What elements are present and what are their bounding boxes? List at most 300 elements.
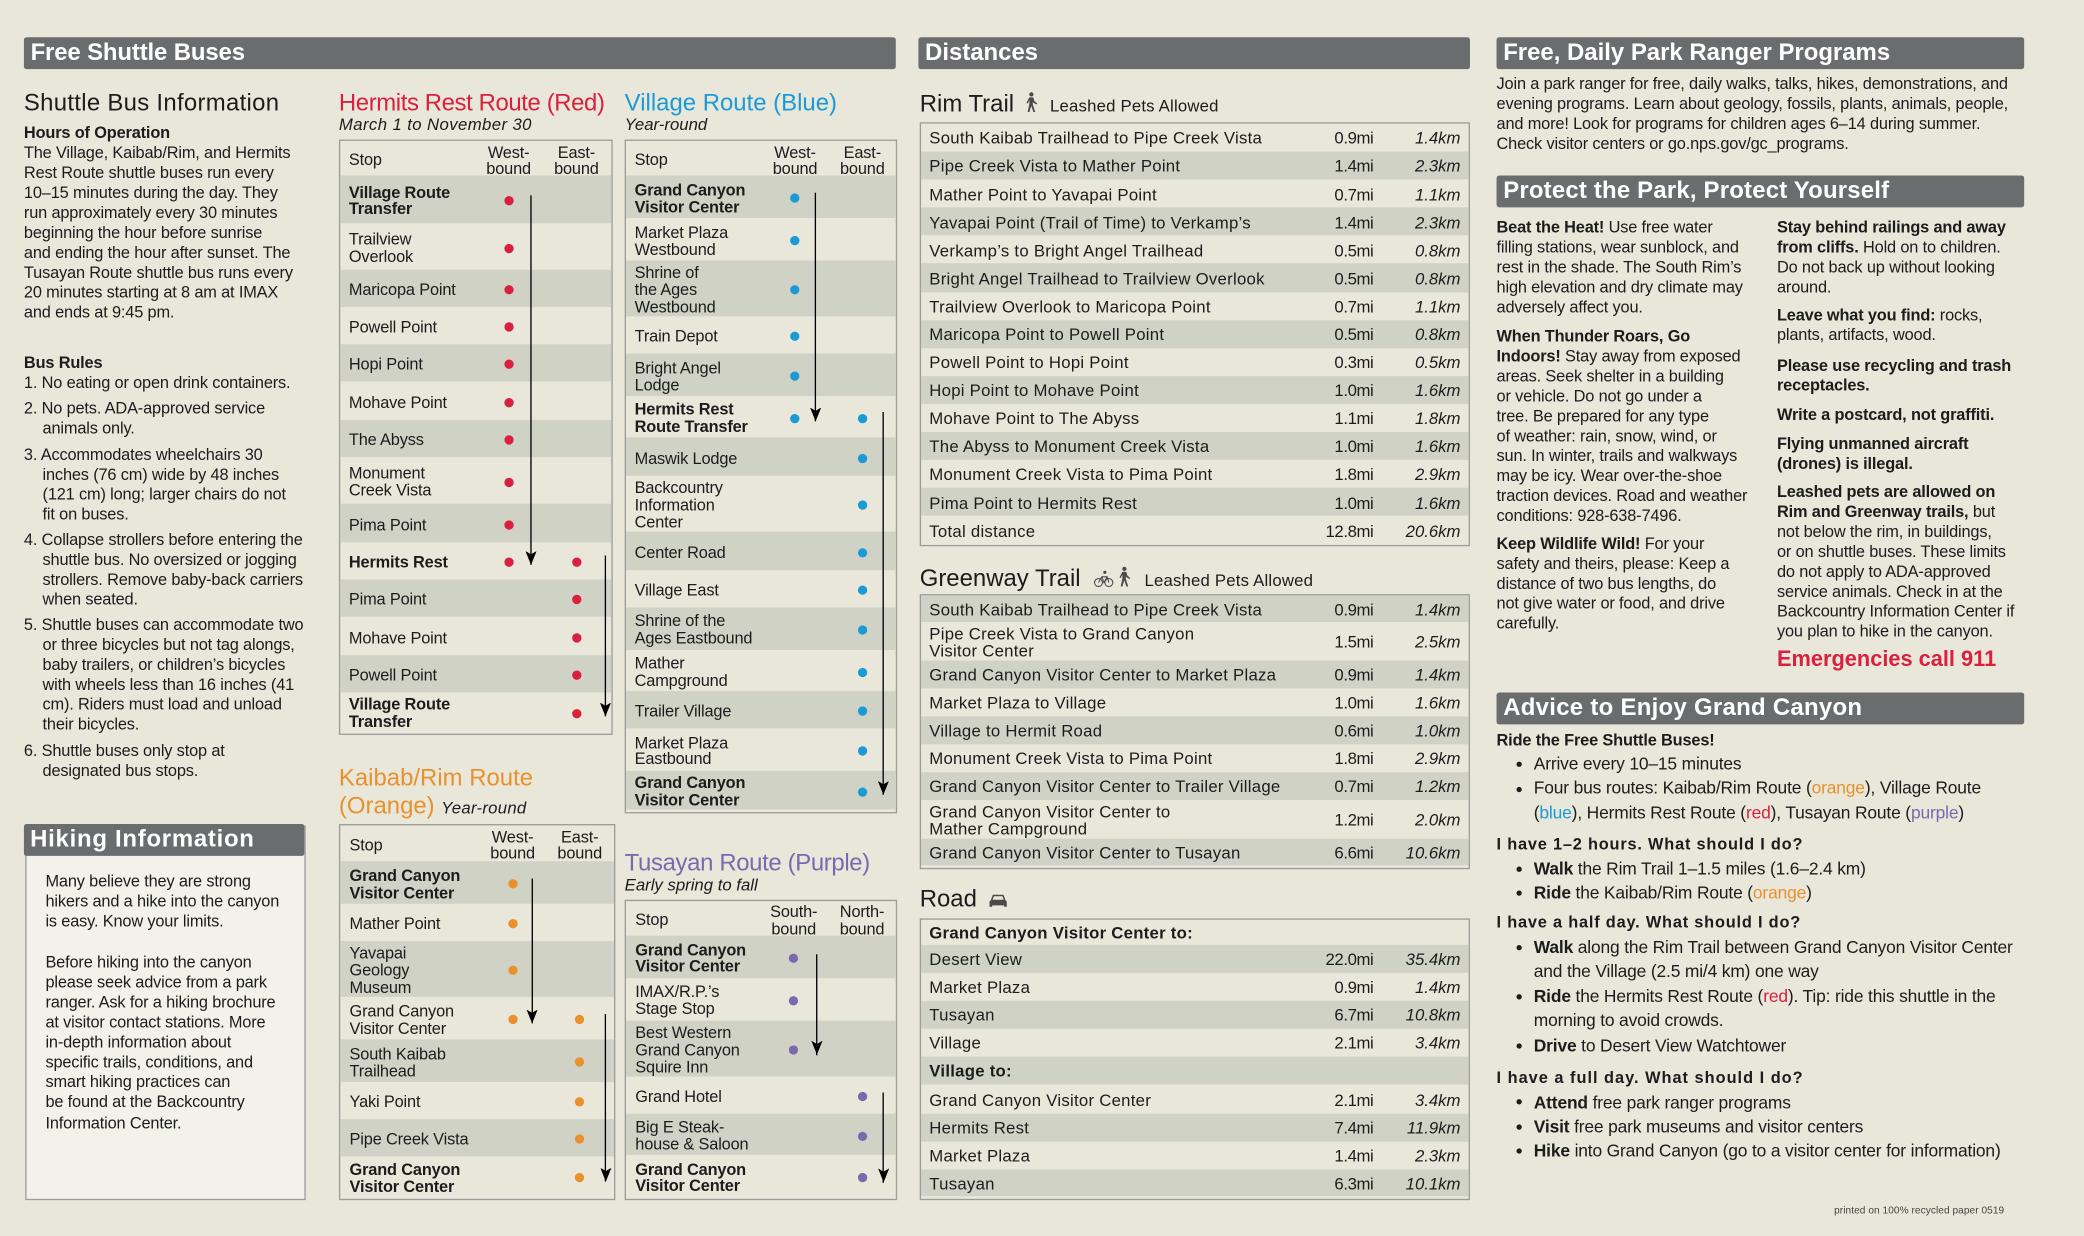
stop: Grand Canyon (635, 181, 745, 199)
row (929, 129, 1460, 148)
row: 1.4km (1415, 979, 1460, 997)
section header: Free Shuttle Buses (24, 37, 896, 69)
bullet list: Arrive every 10–15 minutes (1534, 754, 1741, 774)
row: 1.6km (1415, 438, 1460, 456)
arrow: southbound (816, 954, 818, 1055)
row: 1.2km (1415, 778, 1460, 797)
stop (350, 1093, 584, 1111)
stop: Grand Canyon (350, 1160, 460, 1179)
section header: Free, Daily Park Ranger Programs (1497, 37, 2024, 69)
bullet list: and the Village (2.5 mi/4 km) one way (1534, 961, 1819, 981)
text block: Stay behind railings: Do not back up without looking (1777, 257, 1995, 276)
text block: ranger programs (1497, 74, 2008, 154)
table header: South- (770, 902, 817, 921)
row: 2.1mi (1334, 1091, 1373, 1110)
arrow: eastbound (605, 1014, 607, 1182)
bullet list: Four bus routes: Kaibab/Rim Route (orange), Village Route (1534, 778, 1981, 798)
table header (635, 143, 885, 178)
arrow: westbound (815, 193, 816, 421)
row: 0.9mi (1334, 666, 1373, 685)
stop: Stage Stop (635, 1000, 715, 1018)
row (920, 660, 1469, 688)
row: 1.4km (1415, 600, 1460, 619)
row (920, 432, 1469, 460)
text block: Hours of Operation: and ending the hour after sunset. The (24, 244, 290, 262)
row (920, 152, 1469, 180)
stop (340, 270, 611, 307)
stop (349, 628, 582, 647)
row: Tusayan (929, 1007, 995, 1025)
text block: When Thunder Roars: or vehicle. Do not go under a (1497, 387, 1702, 406)
stop: Visitor Center (635, 1177, 740, 1195)
table header: bound (773, 160, 817, 178)
row: 0.3mi (1334, 354, 1373, 372)
row: Powell Point to Hopi Point (929, 354, 1129, 372)
stop: Best Western (635, 1023, 731, 1042)
bullet list (1534, 1091, 2001, 1164)
text block: Hours of Operation: and ends at 9:45 pm. (24, 304, 174, 322)
row: 0.7mi (1334, 298, 1373, 316)
stop: Transfer (349, 712, 412, 731)
stop (635, 983, 798, 1018)
text block: postcard: Write a postcard, not graffiti. (1777, 405, 1994, 423)
stop (349, 230, 514, 266)
row (920, 772, 1469, 800)
stop: Backcountry (635, 479, 723, 498)
table header: North- (840, 902, 884, 921)
row (920, 348, 1469, 376)
stop: Mather Point (350, 915, 440, 933)
table: Hermits Rest Route stops (338, 140, 613, 735)
row (929, 185, 1460, 204)
text block: Ride the Free Shuttle Buses (1497, 728, 2024, 825)
text block: ranger programs: evening programs. Learn about geology, fossils, plants, animals, people, (1497, 94, 2008, 113)
text block: Hours of Operation: Rest Route shuttle buses run every (24, 164, 274, 182)
stop (635, 479, 868, 532)
rule 3: inches (76 cm) wide by 48 inches (43, 465, 279, 483)
stop: Route Transfer (635, 418, 748, 436)
text block: recycling: receptacles. (1777, 376, 1870, 394)
stop: Bright Angel (635, 359, 721, 377)
stop (350, 1160, 584, 1196)
text block: drones: Flying unmanned aircraft (1777, 434, 1968, 453)
heading: Greenway Trail: Greenway Trail Leashed Pets Allowed (920, 565, 1313, 591)
stop: Monument (349, 464, 425, 483)
table header: bound (840, 919, 884, 938)
stop: South Kaibab (350, 1045, 446, 1063)
stop (340, 579, 611, 617)
row: 2.9km (1415, 466, 1460, 484)
table header: West- (492, 827, 533, 846)
text block: Hours of Operation: The Village, Kaibab/Rim, and Hermits (24, 144, 290, 162)
stop: Village East (635, 581, 719, 599)
text block: hiking advice: Before hiking into the canyon (45, 953, 252, 972)
table: Tusayan Route stops (625, 899, 897, 1200)
stop: Ages Eastbound (635, 629, 752, 648)
bullet list (1534, 857, 1866, 906)
row: Pima Point to Hermits Rest (929, 494, 1137, 512)
table: Road distances (919, 918, 1470, 1200)
row: 2.3km (1415, 213, 1460, 232)
stop: Geology (350, 961, 409, 980)
stop (634, 581, 868, 599)
row: Grand Canyon Visitor Center (929, 1091, 1151, 1110)
text block: Leave what you find (1777, 306, 1982, 346)
text block: When Thunder Roars: sun. In winter, trails and walkways (1497, 447, 1737, 466)
stop: Train Depot (635, 327, 718, 346)
row: Grand Canyon Visitor Center to (929, 803, 1170, 821)
rule 5: their bicycles. (43, 715, 139, 733)
stop: Creek Vista (349, 481, 431, 500)
rule 2: animals only. (43, 418, 135, 437)
row: 0.9mi (1334, 129, 1373, 148)
text block: hiking advice: at visitor contact stations. More (45, 1013, 265, 1032)
text block: When Thunder Roars (1497, 327, 1747, 527)
table header: West- (488, 143, 529, 161)
stop: Market Plaza (635, 223, 728, 242)
stop (349, 393, 514, 411)
row (920, 716, 1469, 744)
stop: Pima Point (349, 590, 426, 609)
arrow: eastbound (883, 412, 884, 795)
stop: Big E Steak- (635, 1118, 724, 1137)
stop: Powell Point (349, 666, 437, 684)
row: Bright Angel Trailhead to Trailview Overlook (929, 270, 1265, 288)
row: 6.6mi (1334, 843, 1373, 862)
row: The Abyss to Monument Creek Vista (929, 438, 1209, 456)
stop: Grand Canyon (635, 1041, 740, 1059)
row: 1.6km (1415, 694, 1460, 713)
heading: Kaibab/Rim Route (Orange) (339, 764, 533, 818)
text block: Keep Wildlife Wild: Keep Wildlife Wild! For your (1497, 534, 1704, 552)
text block: Hours of Operation: Tusayan Route shuttle bus runs every (24, 264, 293, 282)
stop (625, 176, 896, 218)
row (920, 800, 1469, 838)
row (920, 236, 1469, 264)
text block: Keep Wildlife Wild: carefully. (1497, 614, 1559, 632)
row: 6.7mi (1334, 1007, 1373, 1025)
stop: Visitor Center (350, 1177, 454, 1196)
row: Hopi Point to Mohave Point (929, 382, 1139, 400)
stop: Visitor Center (635, 791, 739, 810)
text block: drones: (drones) is illegal. (1777, 454, 1913, 473)
row: 1.5mi (1334, 633, 1373, 652)
table: Kaibab/Rim Route stops (339, 824, 615, 1200)
stop (340, 504, 611, 542)
row: 0.5mi (1334, 241, 1373, 260)
stop: Trailview (349, 230, 411, 249)
stop: Visitor Center (635, 958, 740, 976)
row: 1.6km (1415, 382, 1460, 400)
stop: The Abyss (349, 431, 424, 449)
row (920, 1142, 1469, 1170)
header: Hiking Information (24, 824, 304, 856)
bullet list: morning to avoid crowds. (1534, 1010, 1723, 1030)
text block: leashed pets: Leashed pets are allowed on (1777, 482, 1995, 501)
stop: Yavapai (350, 944, 406, 963)
row: Hermits Rest (929, 1120, 1029, 1138)
stop: Grand Canyon (635, 941, 746, 959)
stop (350, 1002, 584, 1038)
rule 3: fit on buses. (43, 505, 129, 523)
stop: Visitor Center (350, 1019, 446, 1038)
table header: bound (771, 919, 816, 938)
text block: hiking advice: in-depth information about (45, 1033, 231, 1052)
row: from Village: Village to: (929, 1063, 1012, 1081)
row (920, 945, 1469, 973)
table header: bound (557, 844, 602, 863)
stop (626, 1113, 896, 1155)
text block: Beat the Heat: Beat the Heat! Use free water (1497, 218, 1713, 237)
row: Grand Canyon Visitor Center to Market Plaza (929, 666, 1276, 685)
table header (349, 143, 599, 178)
stop (635, 1087, 868, 1106)
row: 2.3km (1415, 157, 1460, 176)
table header (350, 827, 602, 863)
stop: Hermits Rest (635, 401, 734, 419)
text block: When Thunder Roars: may be icy. Wear over-the-shoe (1497, 467, 1722, 486)
row (920, 292, 1469, 320)
text block: Beat the Heat: rest in the shade. The South Rim’s (1497, 258, 1741, 277)
text block: full day (1497, 1066, 2024, 1166)
stop: Museum (350, 978, 411, 997)
row: 7.4mi (1334, 1120, 1373, 1138)
rule 5: 5. Shuttle buses can accommodate two (24, 615, 303, 633)
row: 10.8km (1406, 1007, 1460, 1025)
table header: bound (486, 160, 531, 178)
row: Monument Creek Vista to Pima Point (929, 466, 1212, 484)
text block: hiking advice: please seek advice from a park (45, 973, 267, 992)
stop (625, 438, 896, 476)
rule 5: or three bicycles but not tag alongs, (43, 635, 295, 653)
stop (350, 915, 518, 933)
row: Mather Campground (929, 820, 1087, 838)
text block: Beat the Heat: adversely affect you. (1497, 298, 1643, 317)
text block: hiking advice: is easy. Know your limits. (45, 912, 224, 930)
text block: When Thunder Roars: traction devices. Road and weather (1497, 487, 1747, 506)
row: 1.0mi (1334, 694, 1373, 713)
stop: Pima Point (349, 515, 426, 534)
section header: Free, Daily Park Ranger Programs: Free, Daily Park Ranger Programs (1503, 39, 1890, 65)
stop (349, 318, 514, 337)
panel: Hiking Information (25, 825, 305, 1200)
bullet list: Walk along the Rim Trail between Grand Canyon Visitor Center (1534, 937, 2013, 957)
row: 1.1km (1415, 185, 1460, 204)
stop: Hermits Rest (349, 553, 448, 571)
section header: Distances: Distances (925, 39, 1038, 65)
table: Village Route stops (624, 140, 897, 813)
row: South Kaibab Trailhead to Pipe Creek Vista (929, 129, 1262, 148)
text block: ranger programs: Check visitor centers or go.nps.gov/gc_programs. (1497, 134, 1849, 153)
table header: Stop (635, 150, 668, 169)
section header: Free Shuttle Buses: Free Shuttle Buses (31, 39, 245, 65)
stop (625, 532, 896, 570)
text block: hiking advice: specific trails, conditions, and (45, 1053, 253, 1072)
row: Desert View (929, 951, 1022, 970)
heading: Hermits Rest Route (Red) (339, 89, 605, 134)
row: 1.4mi (1334, 1148, 1373, 1166)
text block: Hours of Operation: Hours of Operation (24, 124, 170, 142)
stop (349, 553, 582, 571)
row: Monument Creek Vista to Pima Point (929, 750, 1212, 769)
stop: Squire Inn (635, 1058, 708, 1076)
row: Mohave Point to The Abyss (929, 410, 1139, 428)
stop (626, 936, 896, 978)
heading: Village Route (Blue) (624, 89, 837, 134)
text block: Stay behind railings: Stay behind railings and away (1777, 217, 2006, 236)
row: 2.9km (1415, 750, 1460, 769)
text block: Stay behind railings: around. (1777, 277, 1831, 296)
text block: Stay behind railings (1777, 217, 2006, 297)
stop: Grand Canyon (350, 1002, 454, 1021)
row (920, 320, 1469, 348)
row: Market Plaza to Village (929, 694, 1106, 713)
row: 0.8km (1415, 326, 1460, 344)
stop (626, 1020, 896, 1076)
stop: Visitor Center (350, 883, 454, 902)
section header: Protect the Park, Protect Yourself (1497, 175, 2024, 207)
rule 3 (24, 445, 286, 523)
row (920, 744, 1469, 772)
table header: East- (844, 143, 881, 161)
stop: Market Plaza (635, 733, 728, 752)
text block: leashed pets: you plan to hike in the canyon. (1777, 622, 1993, 641)
bullet list: Walk the Rim Trail 1–1.5 miles (1.6–2.4 km) (1534, 858, 1866, 878)
stop (635, 733, 868, 769)
text block: leashed pets: service animals. Check in at the (1777, 582, 2003, 601)
row: 0.5km (1415, 354, 1460, 372)
stop: Pipe Creek Vista (350, 1130, 468, 1149)
text block: Ride the Free Shuttle Buses: Ride the Free Shuttle Buses! (1497, 731, 1715, 750)
table header: bound (490, 844, 535, 863)
table: Rim Trail distances (919, 122, 1470, 546)
row: 0.7mi (1334, 185, 1373, 204)
stop: Campground (635, 671, 728, 690)
stop: Overlook (349, 247, 413, 266)
row: 1.8mi (1334, 466, 1373, 484)
text block: When Thunder Roars: When Thunder Roars, Go (1497, 327, 1690, 346)
text block: ranger programs: and more! Look for programs for children ages 6–14 during summer. (1497, 114, 1980, 133)
table: Greenway Trail distances (919, 594, 1470, 869)
text block: 1–2 hours (1497, 832, 2024, 906)
row: 1.0mi (1334, 382, 1373, 400)
row: total (920, 516, 1469, 544)
stop: Center (635, 513, 683, 532)
row: 35.4km (1406, 951, 1460, 970)
text block: leashed pets: Backcountry Information Center if (1777, 602, 2014, 621)
rule 2 (24, 398, 265, 437)
text block: hiking advice: smart hiking practices can (45, 1073, 230, 1092)
row: total: Total distance (929, 522, 1035, 540)
row (920, 973, 1469, 1001)
section header: Protect the Park, Protect Yourself: Protect the Park, Protect Yourself (1503, 177, 1889, 203)
table header: Stop (349, 150, 382, 169)
text block: Beat the Heat: high elevation and dry climate may (1497, 278, 1743, 297)
stop: Mather (635, 654, 685, 673)
row (920, 208, 1469, 236)
header: Hiking Information: Hiking Information (30, 826, 255, 852)
heading: Tusayan Route (Purple): Tusayan Route (Purple) (625, 849, 870, 875)
heading: Shuttle Bus Information: Shuttle Bus Information (24, 89, 279, 116)
text block: hiking advice (45, 872, 279, 1132)
row: 1.0km (1415, 722, 1460, 741)
stop: Lodge (635, 376, 679, 394)
row: 1.8km (1415, 410, 1460, 428)
text block: leashed pets (1777, 482, 2014, 642)
stop: Center Road (635, 543, 726, 562)
row: 0.8km (1415, 270, 1460, 288)
text block: leashed pets: not below the rim, in buildings, (1777, 522, 1992, 541)
row: Grand Canyon Visitor Center to Tusayan (929, 844, 1241, 862)
rule 5: with wheels less than 16 inches (41 (43, 675, 294, 693)
stop (340, 344, 611, 382)
stop: Mohave Point (349, 393, 447, 411)
row: 1.0mi (1334, 438, 1373, 456)
stop: Information (635, 496, 715, 515)
text block: recycling: Please use recycling and trash (1777, 356, 2011, 374)
text block: Keep Wildlife Wild: not give water or food, and drive (1497, 594, 1725, 612)
text block: Beat the Heat (1497, 218, 1743, 318)
text block: Stay behind railings: from cliffs. Hold on to children. (1777, 237, 2001, 256)
rule 4: when seated. (43, 590, 138, 608)
row: 11.9km (1407, 1120, 1460, 1138)
row: Visitor Center (929, 641, 1034, 660)
bullet list: Visit free park museums and visitor centers (1534, 1116, 1863, 1136)
rule 5 (24, 615, 303, 733)
row (920, 488, 1469, 516)
row: 2.1mi (1334, 1035, 1373, 1053)
row: 10.1km (1406, 1175, 1460, 1193)
text block: drones (1777, 434, 1968, 474)
rule 6 (24, 741, 225, 780)
text block: When Thunder Roars: tree. Be prepared for any type (1497, 407, 1709, 426)
text block: Hours of Operation: 20 minutes starting at 8 am at IMAX (24, 284, 278, 302)
stop: Grand Canyon (635, 1160, 746, 1178)
arrow: westbound (530, 195, 532, 565)
stop (625, 261, 896, 317)
text block: When Thunder Roars: areas. Seek shelter in a building (1497, 367, 1724, 386)
row (920, 595, 1469, 622)
row: Tusayan (929, 1175, 995, 1193)
stop: house & Saloon (635, 1135, 748, 1154)
text block: recycling (1777, 356, 2011, 396)
table header: East- (561, 827, 598, 846)
rule 3: (121 cm) long; larger chairs do not (43, 485, 286, 503)
row: total: 12.8mi (1326, 522, 1373, 540)
stop (340, 1040, 613, 1082)
stop (340, 941, 613, 997)
row: 0.7mi (1334, 778, 1373, 797)
row: Yavapai Point (Trail of Time) to Verkamp’s (929, 213, 1251, 232)
stop: Visitor Center (635, 198, 739, 216)
text block: 1–2 hours: I have 1–2 hours. What should I do? (1497, 835, 1803, 853)
rule 4: 4. Collapse strollers before entering the (24, 530, 303, 548)
text block: leashed pets: Rim and Greenway trails, but (1777, 502, 1995, 521)
bullet list (1534, 752, 1981, 826)
text block: hiking advice: ranger. Ask for a hiking brochure (45, 993, 275, 1012)
row: Verkamp’s to Bright Angel Trailhead (929, 242, 1203, 260)
stop: Yaki Point (350, 1093, 420, 1111)
text block: hiking advice: Information Center. (45, 1113, 181, 1132)
stop (635, 654, 868, 690)
text block: hiking advice: be found at the Backcountry (45, 1093, 245, 1112)
row: 10.6km (1406, 843, 1460, 862)
stop (625, 607, 896, 650)
stop: Grand Canyon (635, 774, 745, 793)
text block: full day: I have a full day. What should I do? (1497, 1069, 1804, 1087)
bullet list: Ride the Hermits Rest Route (red). Tip: ride this shuttle in the (1534, 986, 1996, 1006)
rule 2: 2. No pets. ADA-approved service (24, 398, 265, 417)
